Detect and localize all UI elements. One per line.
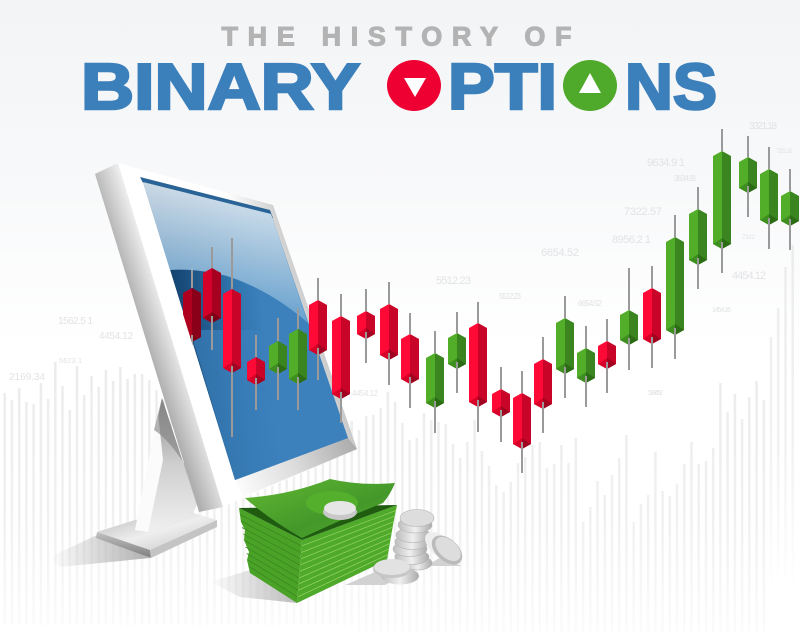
candle 9 (357, 289, 375, 363)
screen gloss (143, 182, 308, 323)
candle 13 (448, 312, 466, 393)
faint price numbers: 7322 (742, 235, 756, 241)
title letters: pti: PTI (448, 50, 557, 123)
title line: the history of: THE HISTORY OF (222, 22, 572, 52)
candle 23 (666, 215, 684, 359)
candle 25 (713, 129, 731, 273)
faint price numbers: 4454.12 (99, 331, 133, 342)
faint price numbers: 7321.18 (776, 149, 793, 155)
candle 14 (469, 302, 487, 432)
faint price numbers: 5623.1 (59, 358, 82, 365)
candle 26 (739, 136, 757, 217)
money stack (239, 479, 397, 603)
coins shadow (345, 558, 462, 585)
candle 15 (492, 367, 510, 442)
candle 19 (577, 326, 595, 407)
faint price numbers: 6654.52 (578, 299, 603, 308)
faint price numbers: 9634.9 1 (647, 157, 685, 169)
candlestick chart (203, 129, 799, 473)
candle 16 (513, 371, 531, 473)
background bar chart (5, 245, 793, 633)
monitor top accent (140, 177, 273, 218)
faint price numbers: 3321.18 (749, 121, 777, 132)
candle 21 (620, 268, 638, 370)
monitor bottom bezel (235, 438, 357, 497)
faint price numbers (9, 121, 793, 398)
banknote highlight (306, 491, 358, 515)
faint price numbers: 1454.16 (712, 307, 731, 314)
candle 8 (332, 294, 350, 423)
faint price numbers: 2169.34 (9, 372, 45, 383)
candle 10 (380, 282, 398, 385)
tilted coins (420, 527, 468, 570)
faint price numbers: 8956.2 1 (612, 234, 651, 246)
candle 2 (203, 247, 221, 350)
icon: red down circle as letter O (387, 60, 441, 111)
candle 20 (598, 319, 616, 393)
icon: green up circle as letter O (563, 60, 617, 111)
candle 28 (781, 169, 799, 250)
front coins (373, 559, 419, 584)
faint price numbers: 3634.91 (674, 174, 698, 183)
faint price numbers: 5284.52 (648, 390, 663, 397)
stack right face (297, 505, 397, 603)
candle 12 (426, 331, 444, 433)
monitor stand (96, 398, 217, 558)
coin stack (393, 510, 434, 570)
candle 4 (247, 335, 265, 410)
faint price numbers: 4454.12 (352, 389, 379, 398)
candle 27 (760, 147, 778, 249)
monitor shadow (50, 535, 150, 567)
monitor screen (143, 182, 348, 480)
candle 18 (556, 296, 574, 398)
candle 3 (223, 238, 241, 437)
candle 17 (534, 337, 552, 433)
money shadow (210, 570, 297, 603)
monitor side panel (95, 163, 223, 512)
title word: binary: BINARY (81, 50, 360, 123)
candle 22 (643, 266, 661, 368)
faint price numbers: 6654.52 (541, 247, 579, 259)
title letters: ns: NS (625, 50, 717, 123)
faint price numbers: 5512.23 (499, 292, 522, 301)
candle 7 (309, 278, 327, 380)
monitor (95, 163, 357, 512)
faint price numbers: 1562.5 1 (58, 316, 93, 327)
coin on banknote (323, 501, 357, 520)
candle 24 (689, 187, 707, 289)
stack top (239, 505, 397, 540)
stack edge lines (240, 510, 396, 597)
title (81, 22, 717, 123)
candle 11 (401, 313, 419, 408)
monitor front frame (118, 163, 357, 507)
faint price numbers: 4454.12 (732, 270, 766, 282)
faint price numbers: 7322.57 (624, 206, 662, 218)
candles inside screen (183, 267, 201, 345)
top banknote (245, 479, 395, 538)
stack left face (239, 508, 302, 603)
candle 1 (183, 267, 201, 345)
candle 6 (289, 308, 307, 410)
faint price numbers: 5512.23 (436, 275, 471, 287)
candle 5 (269, 318, 287, 400)
